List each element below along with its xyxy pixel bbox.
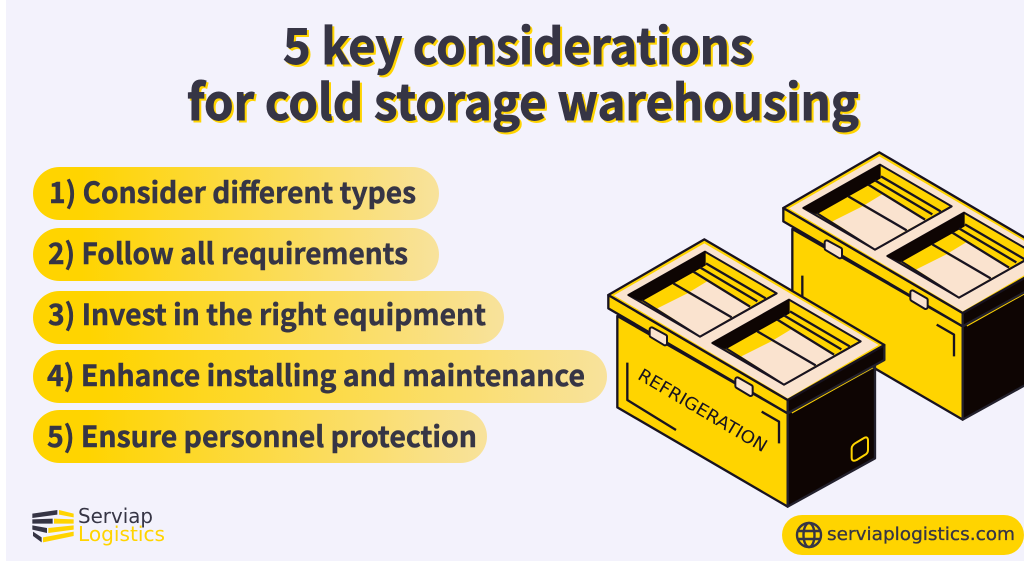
list item 4: 4) Enhance installing and maintenance [47,353,585,395]
logo: Logistics [78,522,165,546]
title: 5 key considerations [283,8,753,79]
list item 5: 5) Ensure personnel protection [47,414,477,456]
logo mark [32,510,74,542]
list item 3: 3) Invest in the right equipment [48,292,486,334]
title [187,8,861,137]
website url: serviaplogistics.com [827,524,1015,545]
illustration: back refrigeration unit [783,152,1024,420]
logo text: Serviap [78,504,153,528]
title: for cold storage warehousing [187,64,859,135]
icon: globe [797,523,821,547]
illustration: front refrigeration unit [608,239,884,507]
logo [32,504,165,546]
list item 2: 2) Follow all requirements [48,231,408,273]
list item 1: 1) Consider different types [49,170,416,212]
title: 5 key considerations [285,10,755,81]
website pill [782,515,1024,555]
title: for cold storage warehousing [189,66,861,137]
illustration: front refrigeration unit: REFRIGERATION [634,365,770,457]
